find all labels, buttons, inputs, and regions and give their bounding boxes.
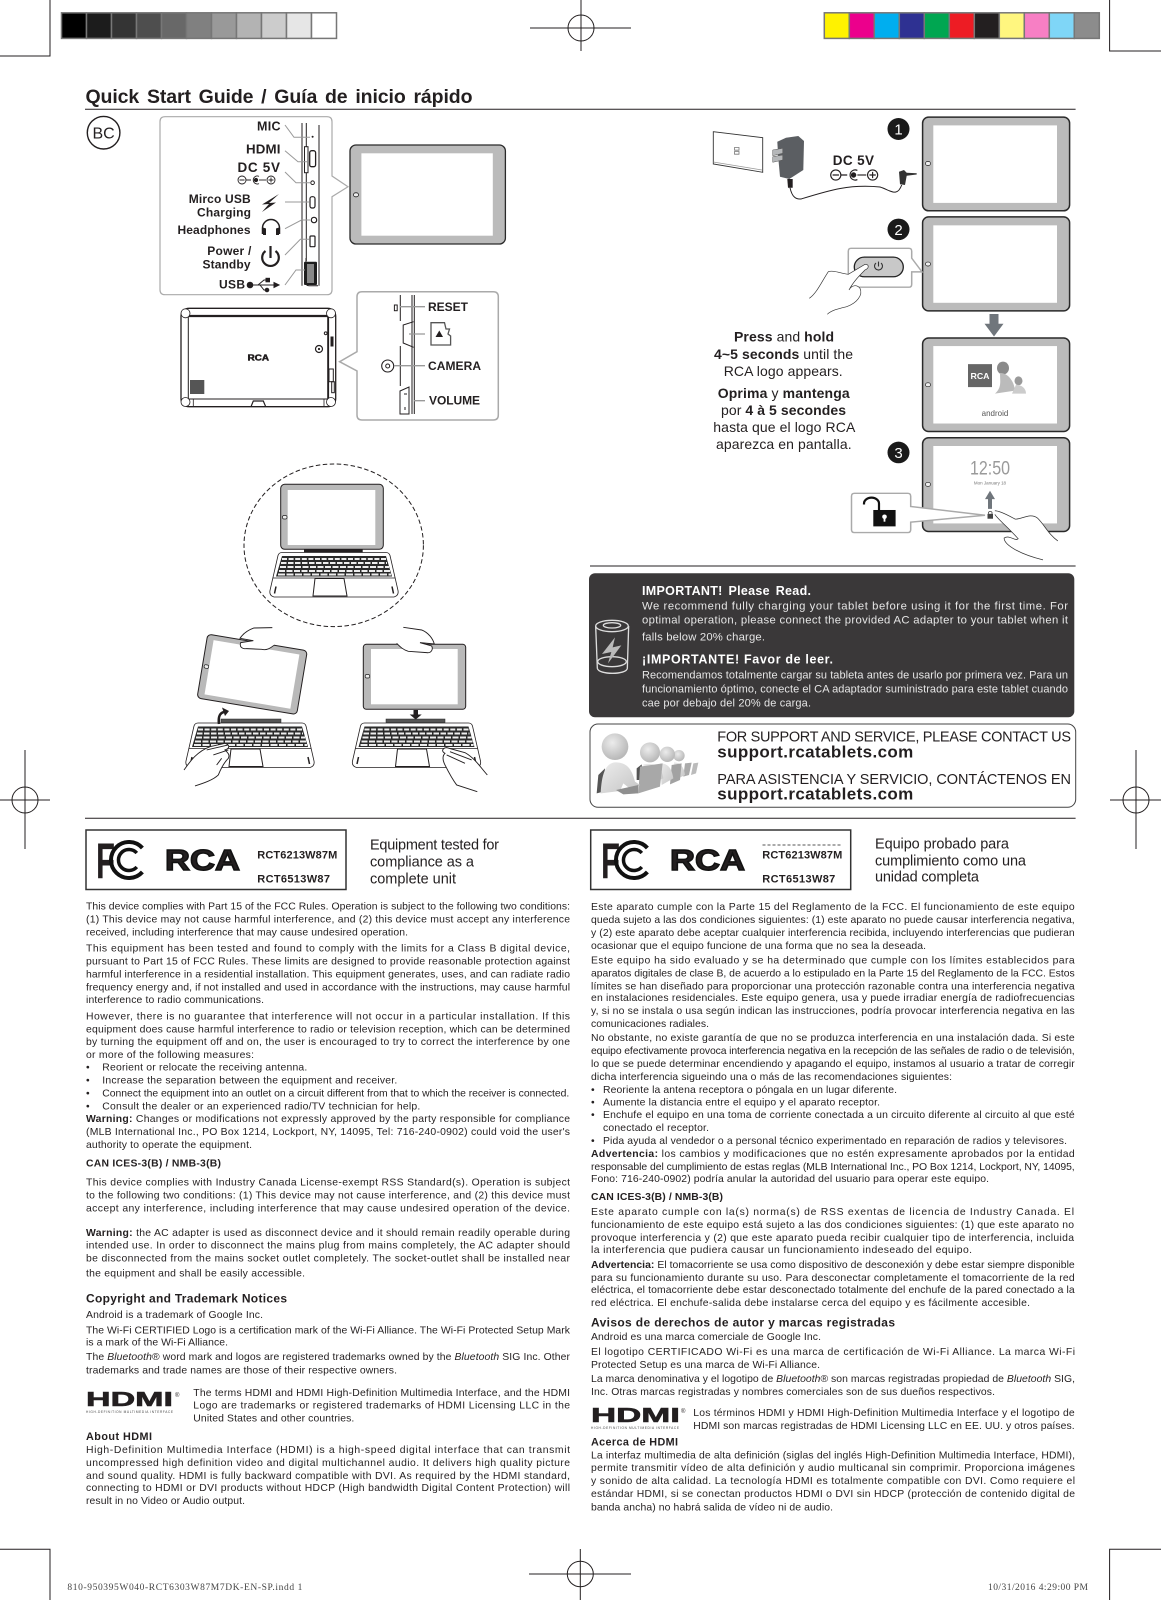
icon: DC polarity: [238, 176, 275, 184]
step 3: unlock screen: 3: [894, 446, 903, 462]
trademark notices: English: [86, 1292, 571, 1376]
FCC statement: Spanish: Este equipo ha sido evaluado y se ha determinado que cumple con los límites establecidos para: [591, 955, 1075, 966]
FCC statement: Spanish: queda sujeto a las dos condiciones siguientes: (1) este aparato no puede causar interferencia negativa,: [591, 915, 1075, 926]
IC statement and warning: English: be disconnected from the mains socket outlet completely. The socket-outlet shall be installed near: [86, 1253, 571, 1264]
HDMI logo: Spanish: HIGH-DEFINITION MULTIMEDIA INTERFACE: [591, 1426, 679, 1430]
IC statement and warning: Spanish: [591, 1192, 1075, 1309]
step 1: connect the adapter: 1: [894, 122, 903, 138]
FCC statement: English: frequency energy and, if not installed and used in accordance with the instructions, may cause harmful: [86, 983, 570, 994]
about HDMI: English: result in no Video or Audio output.: [86, 1496, 245, 1507]
FCC statement: English: pursuant to Part 15 of FCC Rules. These limits are designed to provide reasonable protection against: [86, 957, 570, 968]
FCC statement: English: Increase the separation between the equipment and receiver.: [102, 1076, 397, 1087]
tablet front: overview: [350, 145, 505, 244]
IC statement and warning: Spanish: funcionamiento de este equipo está sujeto a las dos condiciones siguientes: (1) que este aparato no: [591, 1220, 1074, 1231]
power-on instructions: Press and hold: [734, 329, 834, 345]
FCC statement: Spanish: ocasionar que el equipo funcione de una forma que no sea la deseada.: [591, 941, 926, 952]
tablet with RCA splash: RCA: [970, 371, 989, 381]
model numbers: RCT6513W87: [257, 874, 330, 886]
trademark notices: English: The Wi-Fi CERTIFIED Logo is a certification mark of the Wi-Fi Alliance. The Wi-Fi Protected Setup Mark: [86, 1325, 571, 1336]
android wordmark: android: [982, 409, 1008, 418]
FCC statement: English: This device complies with Part 15 of the FCC Rules. Operation is subject to the following two conditions:: [86, 902, 570, 913]
trademark notices: Spanish: Avisos de derechos de autor y marcas registradas: [591, 1316, 895, 1330]
icon: micro SD: [431, 323, 451, 345]
step 2: press power: 2: [894, 223, 903, 239]
footer: file name: 810-950395W040-RCT6303W87M7DK-EN-SP.indd 1: [67, 1583, 303, 1593]
IC statement and warning: English: intended use. In order to disconnect the mains plug from mains completely, the AC adapter should: [86, 1240, 570, 1251]
IC statement and warning: Spanish: para su funcionamiento durante su uso. Para desconectar completamente el tomacorriente de la red: [591, 1273, 1075, 1284]
small lock: [988, 511, 993, 519]
IC statement and warning: Spanish: provoque interferencia y (2) que este aparato pueda recibir cualquier tipo de interferencia, incluida: [591, 1233, 1074, 1244]
trademark notices: English: trademarks and trade names are those of their respective owners.: [86, 1365, 397, 1376]
trademark notices: English: The Bluetooth® word mark and logos are registered trademarks owned by the Bluetooth SIG Inc. Other: [86, 1352, 571, 1363]
FCC statement: Spanish: comunicaciones radiales.: [591, 1019, 709, 1030]
FCC statement: Spanish: conectado el receptor.: [603, 1123, 709, 1134]
trademark notices: English: Android is a trademark of Google Inc.: [86, 1310, 263, 1321]
hand: [809, 264, 868, 314]
IC statement and warning: English: [86, 1158, 571, 1279]
trademark notices: English: Copyright and Trademark Notices: [86, 1292, 287, 1306]
HDMI logo: Spanish: [591, 1404, 686, 1430]
trademark notices: Spanish: Inc. Otras marcas registradas y nombres comerciales son de sus dueños respectivos.: [591, 1387, 995, 1398]
about HDMI: Spanish: estándar HDMI, si se conectan productos HDMI o DVI sin HDCP (protección de contenido digital de: [591, 1489, 1075, 1500]
port labels: Charging: [197, 206, 251, 220]
power-on instructions: [713, 329, 856, 452]
HDMI note: English: Logo are trademarks or registered trademarks of HDMI Licensing LLC in the: [193, 1400, 570, 1411]
port labels: Headphones: [178, 223, 251, 237]
port labels: RESET: [428, 300, 469, 314]
English notice: IMPORTANT! Please Read.: [642, 584, 811, 598]
FCC statement: Spanish: •: [591, 1136, 595, 1147]
FCC statement: English: or more of the following measures:: [86, 1050, 254, 1061]
about HDMI: Spanish: La interfaz multimedia de alta definición (siglas del inglés High-Definition Multimedia Interface, HDMI),: [591, 1451, 1075, 1462]
IC statement and warning: English: CAN ICES-3(B) / NMB-3(B): [86, 1158, 221, 1169]
HDMI note: Spanish: [693, 1408, 1075, 1432]
model numbers: RCT6213W87M: [257, 850, 337, 862]
Spanish notice: Recomendamos totalmente cargar su tableta antes de usarlo por primera vez. Para un: [642, 669, 1068, 681]
port labels: Power /: [207, 244, 252, 258]
IC statement and warning: English: accept any interference, including interference that may cause undesired operation of the device.: [86, 1203, 570, 1214]
speaker grille: [190, 380, 204, 394]
port labels: [178, 120, 280, 292]
FCC statement: English: harmful interference in a residential installation. This equipment generates, uses, and can radiate radio: [86, 970, 570, 981]
FCC statement: English: •: [86, 1063, 90, 1074]
power-on instructions: aparezca en pantalla.: [716, 436, 852, 452]
compliance note: Spanish: unidad completa: [875, 870, 980, 886]
hands: [184, 628, 274, 786]
keyboard dock illustration: attaching tablet: [352, 627, 487, 792]
FC logo: [96, 833, 142, 889]
icon: power adapter: [773, 136, 917, 199]
support text: FOR SUPPORT AND SERVICE, PLEASE CONTACT US: [717, 730, 1071, 746]
FCC statement: English: •: [86, 1102, 90, 1113]
about HDMI: English: and sound quality. HDMI is fully backward compatible with DVI. As required by the HDMI standard,: [86, 1471, 570, 1482]
FCC statement: Spanish: responsable del cumplimiento de estas reglas (MLB International Inc., PO Box 1214, Lockport, NY, 14095,: [591, 1162, 1075, 1173]
support text: support.rcatablets.com: [717, 784, 913, 803]
hand: [995, 511, 1058, 560]
FCC statement: Spanish: •: [591, 1085, 595, 1096]
HDMI logo: Spanish: ®: [681, 1408, 686, 1415]
about HDMI: English: [86, 1431, 570, 1507]
IC statement and warning: English: This device complies with Industry Canada License-exempt RSS Standard(s). Operation is subject: [86, 1177, 570, 1188]
icon: battery: [596, 620, 629, 673]
arrow: down to splash: [984, 314, 1004, 336]
FCC statement: English: equipment does cause harmful interference to radio or television reception, which can be determined: [86, 1025, 570, 1036]
English notice: optimal operation, please connect the provided AC adapter to your tablet when it: [642, 614, 1069, 626]
icon: support people: [597, 733, 698, 794]
FCC statement: Spanish: Reoriente la antena receptora o póngala en un lugar diferente.: [603, 1085, 897, 1096]
compliance note: Spanish: Equipo probado para: [875, 836, 1010, 852]
FCC statement: English: Connect the equipment into an outlet on a circuit different from that to which the receiver is connected.: [102, 1089, 569, 1100]
about HDMI: English: uncompressed high definition video and digital multichannel audio. It delivers high quality picture: [86, 1458, 570, 1469]
HDMI note: Spanish: HDMI son marcas registradas de HDMI Licensing LLC en EE. UU. y otros países.: [693, 1421, 1075, 1432]
compliance note: English: compliance as a: [370, 854, 475, 870]
English notice: [642, 584, 1069, 643]
English notice: We recommend fully charging your tablet before using it for the first time. For: [642, 600, 1068, 612]
step 1: connect the adapter: [713, 117, 1070, 211]
step number: [888, 219, 910, 240]
power-on instructions: por 4 à 5 secondes: [721, 402, 846, 418]
icon: wall outlet: [713, 132, 763, 172]
port labels: CAMERA: [428, 359, 481, 373]
step 3: unlock screen: [852, 438, 1070, 560]
tablet back view: [181, 308, 336, 407]
dogs: [995, 362, 1026, 394]
tablet: [923, 217, 1070, 311]
port labels: Standby: [202, 258, 251, 272]
step number: [888, 118, 910, 140]
step number: [888, 442, 910, 463]
about HDMI: Spanish: Acerca de HDMI: [591, 1437, 678, 1449]
HDMI note: Spanish: Los términos HDMI y HDMI High-Definition Multimedia Interface y el logotipo de: [693, 1408, 1075, 1419]
leader lines: [285, 125, 310, 285]
FCC statement: Spanish: límites se han diseñado para proporcionar una protección razonable contra una interferencia negativa: [591, 981, 1075, 992]
port labels: USB: [219, 278, 245, 292]
FCC statement: English: Warning: Changes or modifications not expressly approved by the party responsible for compliance: [86, 1114, 570, 1125]
FCC statement: Spanish: y (2) este aparato debe aceptar cualquier interferencia recibida, incluyendo interferencias que pudieran: [591, 928, 1075, 939]
FCC statement: Spanish: Este aparato cumple con la Parte 15 del Reglamento de la FCC. El funcionamiento de este equipo: [591, 902, 1075, 913]
model numbers: RCT6513W87: [762, 874, 835, 886]
leader lines: [394, 307, 425, 401]
icon: headphones: [262, 220, 280, 235]
power button callout: [848, 248, 922, 287]
FCC statement: Spanish: lo que se puede determinar encendiendo y apagando el equipo, instamos al usuario a tratar de corregir: [591, 1059, 1075, 1070]
RCA logo: RCA: [670, 845, 745, 877]
FCC statement: Spanish: aparatos digitales de clase B, de acuerdo a lo estipulado en la Parte 15 del Reglamento de la FCC. Estos: [591, 968, 1075, 979]
IC statement and warning: Spanish: Este aparato cumple con la(s) norma(s) de RSS exentas de licencia de Industry Canada. El: [591, 1207, 1074, 1218]
icon: USB trident: [247, 278, 279, 292]
FCC statement: English: [86, 902, 570, 1151]
panel: tablet side ports callout: [160, 117, 348, 295]
about HDMI: English: connecting to HDMI or DVI products without HDCP (High bandwidth Digital Content Protection) will: [86, 1483, 570, 1494]
hands: [397, 627, 487, 792]
FCC statement: Spanish: Advertencia: los cambios y modificaciones que no estén expresamente aprobados por la entidad: [591, 1149, 1075, 1160]
FCC statement: English: authority to operate the equipment.: [86, 1140, 252, 1151]
DC label: DC 5V: [833, 153, 874, 168]
icon: BC badge: [87, 116, 120, 149]
tablet: [923, 438, 1070, 531]
title: Quick Start Guide / Guía de inicio rápido: [86, 86, 473, 108]
port labels: VOLUME: [429, 394, 480, 408]
tablet with RCA splash: [923, 338, 1070, 431]
FCC statement: Spanish: Aumente la distancia entre el equipo y el aparato receptor.: [603, 1097, 880, 1108]
FCC statement: English: •: [86, 1076, 90, 1087]
FCC statement: Spanish: equipo efectivamente provoca interferencia negativa en la recepción de las señales de radio o de televisión,: [591, 1046, 1075, 1057]
port labels: Mirco USB: [189, 192, 251, 206]
Spanish notice: funcionamiento óptimo, conecte el CA adaptador suministrado para este tablet cuando: [642, 683, 1068, 695]
FCC statement: English: interference to radio communications.: [86, 995, 264, 1006]
FCC statement: English: This equipment has been tested and found to comply with the limits for a Class B digital device,: [86, 944, 570, 955]
port labels: MIC: [257, 120, 280, 134]
HDMI logo: English: HDMI: [86, 1388, 173, 1411]
port labels: [428, 300, 481, 408]
compliance note: English: complete unit: [370, 871, 456, 887]
trademark notices: English: is a mark of the Wi-Fi Alliance.: [86, 1337, 228, 1348]
power-on instructions: Oprima y mantenga: [718, 385, 850, 401]
FCC statement: English: Reorient or relocate the receiving antenna.: [102, 1063, 307, 1074]
trademark notices: Spanish: Android es una marca comerciale de Google Inc.: [591, 1332, 821, 1343]
arrow: swipe up: [985, 491, 995, 509]
HDMI note: English: The terms HDMI and HDMI High-Definition Multimedia Interface, and the HDMI: [193, 1388, 570, 1399]
HDMI note: English: [193, 1388, 570, 1424]
HDMI note: English: United States and other countries.: [193, 1413, 354, 1424]
arrow: push down: [410, 710, 422, 720]
Spanish notice: cae por debajo del 20% de carga.: [642, 697, 811, 709]
model numbers: RCT6213W87M: [762, 849, 842, 861]
tablet: [923, 117, 1070, 211]
FCC statement: Spanish: Fono: 716-240-0902) podría anular la autoridad del usuario para operar este equipo.: [591, 1174, 989, 1185]
Spanish notice: ¡IMPORTANTE! Favor de leer.: [642, 653, 833, 667]
FCC statement: English: •: [86, 1089, 90, 1100]
panel: important notice: [589, 573, 1074, 717]
trademark notices: Spanish: Protected Setup es una marca de Wi-Fi Alliance.: [591, 1360, 820, 1371]
trademark notices: Spanish: El logotipo CERTIFICADO Wi-Fi es una marca de certificación de Wi-Fi Alliance. La marca Wi-Fi: [591, 1347, 1075, 1358]
FCC statement: English: However, there is no guarantee that interference will not occur in a particular installation. If this: [86, 1012, 570, 1023]
FCC statement: English: (MLB International Inc., PO Box 1214, Lockport, NY, 14095, Tel: 716-240-0902) could void the user's: [86, 1127, 570, 1138]
device edge drawing: [302, 123, 319, 286]
support text: [717, 730, 1071, 803]
grayscale calibration bar: [62, 13, 336, 38]
FCC statement: Spanish: Enchufe el equipo en una toma de corriente conectada a un circuito diferente al circuito al que esté: [603, 1110, 1075, 1121]
arrow: lift up: [219, 712, 224, 724]
power-on instructions: 4~5 seconds until the: [714, 346, 853, 362]
compliance note: English: Equipment tested for: [370, 837, 499, 853]
keyboard dock illustration: removing tablet: [184, 628, 314, 786]
model numbers: [762, 849, 842, 886]
camera: [316, 346, 322, 352]
edge drawing: [382, 295, 414, 414]
compliance note: Spanish: [875, 836, 1027, 886]
about HDMI: Spanish: [591, 1437, 1075, 1514]
FCC statement: English: received, including interference that may cause undesired operation.: [86, 928, 408, 939]
English notice: falls below 20% charge.: [642, 631, 765, 643]
edge ports: [251, 332, 334, 407]
trademark notices: Spanish: La marca denominativa y el logotipo de Bluetooth® son marcas registradas propiedad de Bluetooth SIG,: [591, 1374, 1075, 1385]
RCA square: [968, 364, 992, 387]
icon: power: [262, 246, 279, 266]
FCC statement: Spanish: en instalaciones residenciales. Este equipo genera, usa y puede irradiar energía de radiofrecuencias: [591, 993, 1075, 1004]
RCA mark: RCA: [248, 354, 269, 363]
FCC label: English: [86, 830, 346, 890]
about HDMI: English: High-Definition Multimedia Interface (HDMI) is a high-speed digital interface that can transmit: [86, 1445, 570, 1456]
about HDMI: Spanish: permite transmitir vídeo de alta definición y audio multicanal sin comprimir. Proporciona imágenes: [591, 1463, 1075, 1474]
colour calibration bar: [824, 13, 1099, 38]
compliance note: English: [370, 837, 499, 887]
FCC statement: Spanish: y, si no se instala o usa según indican las instrucciones, podría provocar interferencia negativa en las: [591, 1006, 1075, 1017]
about HDMI: Spanish: y sonido de alta calidad. La tecnología HDMI es totalmente compatible con DVI. Como requiere el: [591, 1476, 1075, 1487]
HDMI logo: Spanish: HDMI: [591, 1404, 680, 1427]
power-on instructions: hasta que el logo RCA: [713, 419, 856, 435]
FCC statement: English: (1) This device may not cause harmful interference, and (2) this device must accept any interference: [86, 915, 570, 926]
IC statement and warning: English: Warning: the AC adapter is used as disconnect device and it should remain readily operable during: [86, 1228, 570, 1239]
step 2: press power: [809, 217, 1070, 314]
icon: charging bolt: [262, 194, 279, 212]
power-on instructions: RCA logo appears.: [724, 363, 843, 379]
keyboard dock illustration: attached: [244, 464, 423, 627]
IC statement and warning: Spanish: la interferencia que pudiera causar un funcionamiento indeseado del equipo.: [591, 1245, 972, 1256]
clock: 12:50: [970, 458, 1010, 479]
Spanish notice: [642, 653, 1068, 709]
FCC statement: Spanish: Pida ayuda al vendedor o a personal técnico experimentado en reparación de radios y televisores.: [603, 1136, 1067, 1147]
port labels: HDMI: [246, 141, 280, 156]
model numbers: [257, 850, 337, 886]
about HDMI: Spanish: banda ancha) no habrá salida de vídeo ni de audio.: [591, 1503, 833, 1514]
IC statement and warning: Spanish: CAN ICES-3(B) / NMB-3(B): [591, 1192, 723, 1203]
trademark notices: Spanish: [591, 1316, 1075, 1398]
support text: PARA ASISTENCIA Y SERVICIO, CONTÁCTENOS EN: [717, 771, 1071, 788]
step 3: unlock screen: Mon January 18: [974, 481, 1007, 486]
HDMI logo: English: [86, 1388, 180, 1414]
FCC statement: Spanish: •: [591, 1110, 595, 1121]
HDMI logo: English: HIGH-DEFINITION MULTIMEDIA INTERFACE: [86, 1410, 173, 1414]
footer: date stamp: 10/31/2016 4:29:00 PM: [988, 1583, 1089, 1593]
compliance note: Spanish: cumplimiento como una: [875, 853, 1027, 869]
FCC statement: Spanish: •: [591, 1097, 595, 1108]
panel: support contact: [590, 724, 1076, 807]
FCC statement: Spanish: No obstante, no existe garantía de que no se produzca interferencia en una instalación dada. Si este: [591, 1033, 1075, 1044]
icon: open padlock: [864, 498, 896, 526]
RCA logo: RCA: [165, 845, 240, 877]
support text: support.rcatablets.com: [717, 743, 913, 762]
IC statement and warning: English: to the following two conditions: (1) This device may not cause interference, and (2) this device must: [86, 1190, 570, 1201]
IC statement and warning: Spanish: red eléctrica. El enchufe-salida debe instalarse cerca del equipo y es fácilmente accesible.: [591, 1298, 1030, 1309]
FCC statement: Spanish: dicha interferencia sigueindo una o más de las recomendaciones siguientes:: [591, 1072, 952, 1083]
icon: BC badge: BC: [92, 126, 115, 142]
FC logo: [601, 833, 647, 889]
IC statement and warning: English: the equipment and shall be easily accessible.: [86, 1268, 305, 1279]
panel: back ports callout: [340, 292, 498, 420]
FCC statement: English: by turning the equipment off and on, the user is encouraged to try to correct the interference by one: [86, 1037, 570, 1048]
IC statement and warning: Spanish: Advertencia: El tomacorriente se usa como dispositivo de desconexión y debe estar siempre disponible: [591, 1260, 1075, 1271]
IC statement and warning: Spanish: eléctrica, el tomacorriente debe estar desconectado totalmente del enchufe de la pared conectado a la: [591, 1285, 1075, 1296]
unlock callout: [852, 493, 985, 533]
about HDMI: English: About HDMI: [86, 1431, 152, 1443]
FCC statement: Spanish: [591, 902, 1075, 1185]
FCC statement: English: Consult the dealer or an experienced radio/TV technician for help.: [102, 1102, 420, 1113]
port labels: DC 5V: [238, 160, 280, 175]
FCC label: Spanish: [591, 830, 851, 890]
HDMI logo: English: ®: [175, 1392, 180, 1399]
